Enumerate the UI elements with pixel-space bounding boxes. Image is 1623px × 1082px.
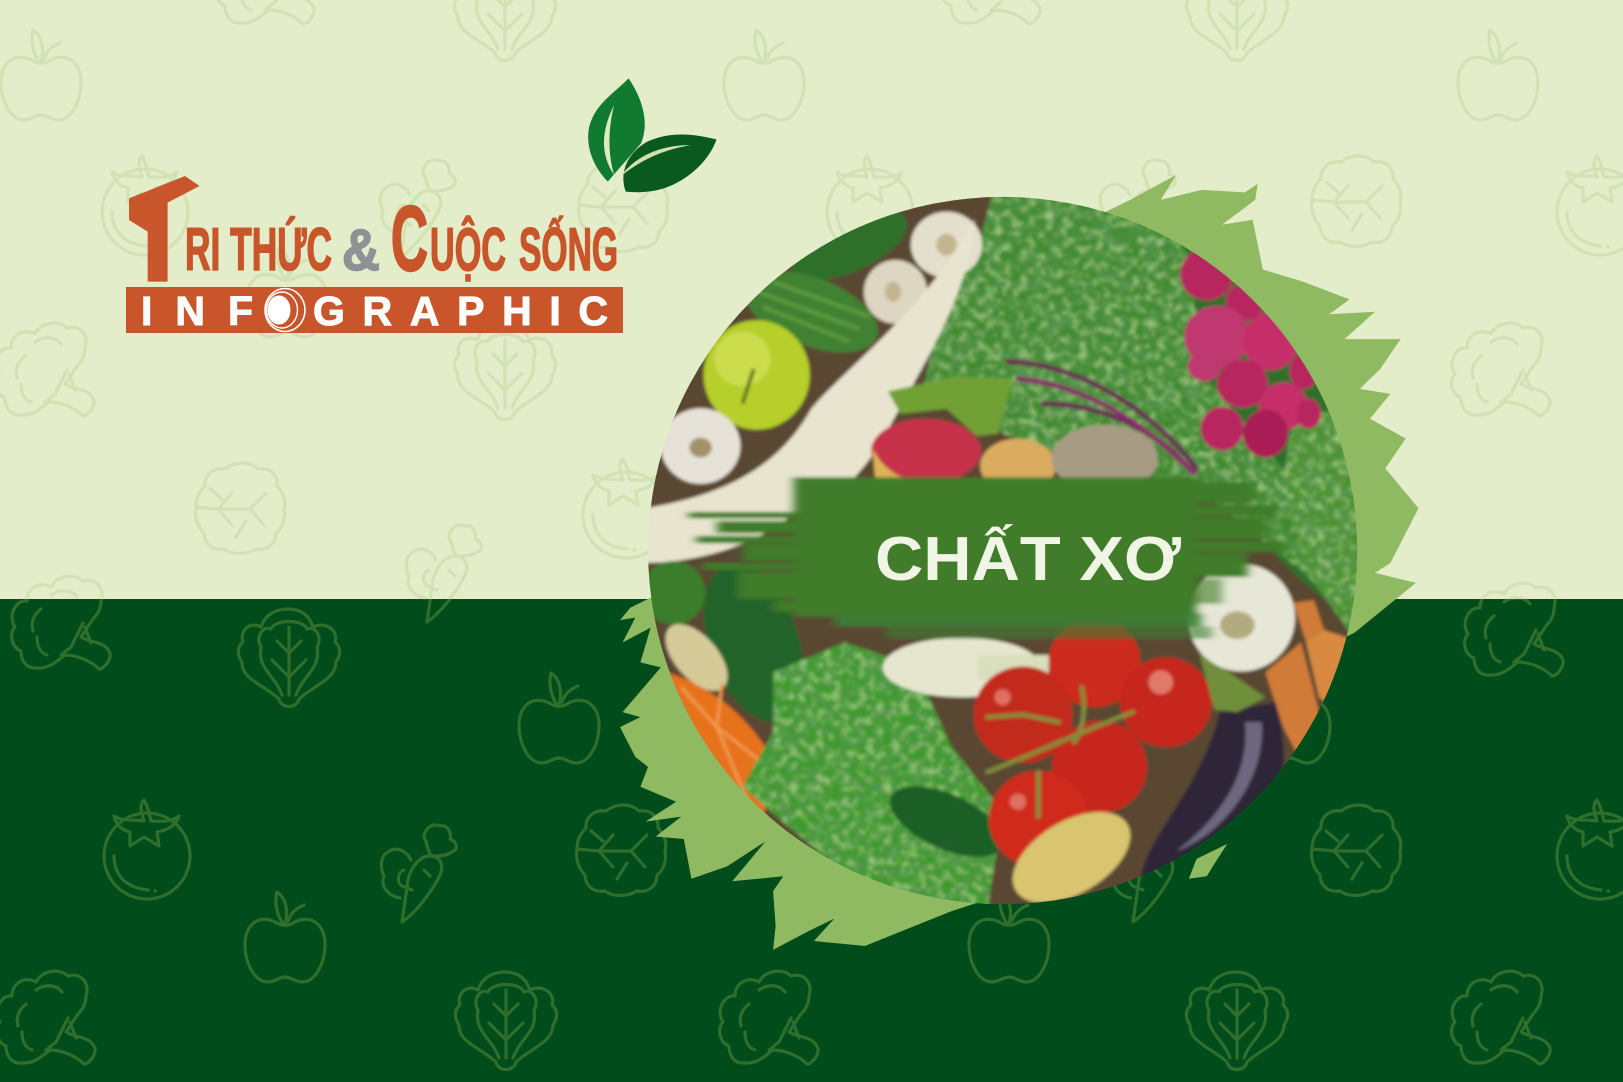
- right side leafy greens: [1283, 409, 1365, 633]
- eggplant: [1140, 652, 1284, 882]
- logo: ring O mark: [265, 288, 305, 332]
- leaf: upper: [588, 78, 645, 182]
- fennel bulb: [883, 638, 1049, 697]
- onion: [978, 436, 1057, 480]
- logo: infographic banner: [126, 287, 623, 333]
- logo: INF letters: INF: [141, 288, 253, 334]
- pale green leaf: [888, 376, 1013, 436]
- green painted band: [689, 477, 1283, 639]
- garlic right: [1188, 564, 1295, 671]
- radish bunch: [1180, 249, 1321, 457]
- circular vegetable collage: [640, 190, 1365, 922]
- logo: GRAPHIC letters: GRAPHIC: [313, 288, 608, 334]
- brush stroke: lower left: [620, 598, 1227, 950]
- logo: big letter C: C: [391, 188, 428, 290]
- leaf: lower: [623, 134, 717, 192]
- background: dark green lower band: [0, 599, 1623, 1082]
- logo: wordmark UỘC: UỘC: [430, 216, 506, 283]
- garlic left: [661, 408, 740, 484]
- logo: ampersand: &: [342, 218, 380, 283]
- logo: Tri thuc & Cuoc song Infographic: [126, 176, 623, 334]
- beet: [1050, 422, 1160, 480]
- red apple: [871, 419, 981, 483]
- carrot greens: [922, 196, 1313, 582]
- logo: big letter T: [129, 176, 200, 282]
- icon: two green leaves: [588, 78, 717, 192]
- tomatoes: [974, 618, 1212, 867]
- cucumber top: [791, 212, 908, 281]
- parsley: [742, 643, 1003, 911]
- tomato vine: [987, 687, 1133, 817]
- daikon radish: [646, 220, 975, 563]
- brush stroke: upper right: [1100, 175, 1418, 667]
- courgette bottom: [888, 784, 1000, 859]
- title: CHẤT XƠ: CHẤT XƠ: [875, 525, 1181, 594]
- pumpkin: [669, 670, 768, 814]
- cucumber middle: [747, 270, 880, 354]
- logo: wordmark RI THỨC: RI THỨC: [185, 216, 332, 283]
- potato: [1010, 809, 1133, 903]
- background: light upper band: [0, 0, 1623, 599]
- pale squash: [663, 621, 730, 694]
- small round zucchini: [642, 561, 705, 625]
- zucchini long: [702, 568, 804, 723]
- logo: wordmark SỐNG: SỐNG: [519, 216, 618, 283]
- green apple: [704, 320, 810, 430]
- carrots: [1264, 598, 1347, 752]
- mushroom bulbs: [864, 212, 982, 324]
- wood background: [640, 190, 1365, 911]
- dark foliage behind radishes and right side: [1179, 244, 1329, 600]
- beet stems: [1008, 361, 1197, 473]
